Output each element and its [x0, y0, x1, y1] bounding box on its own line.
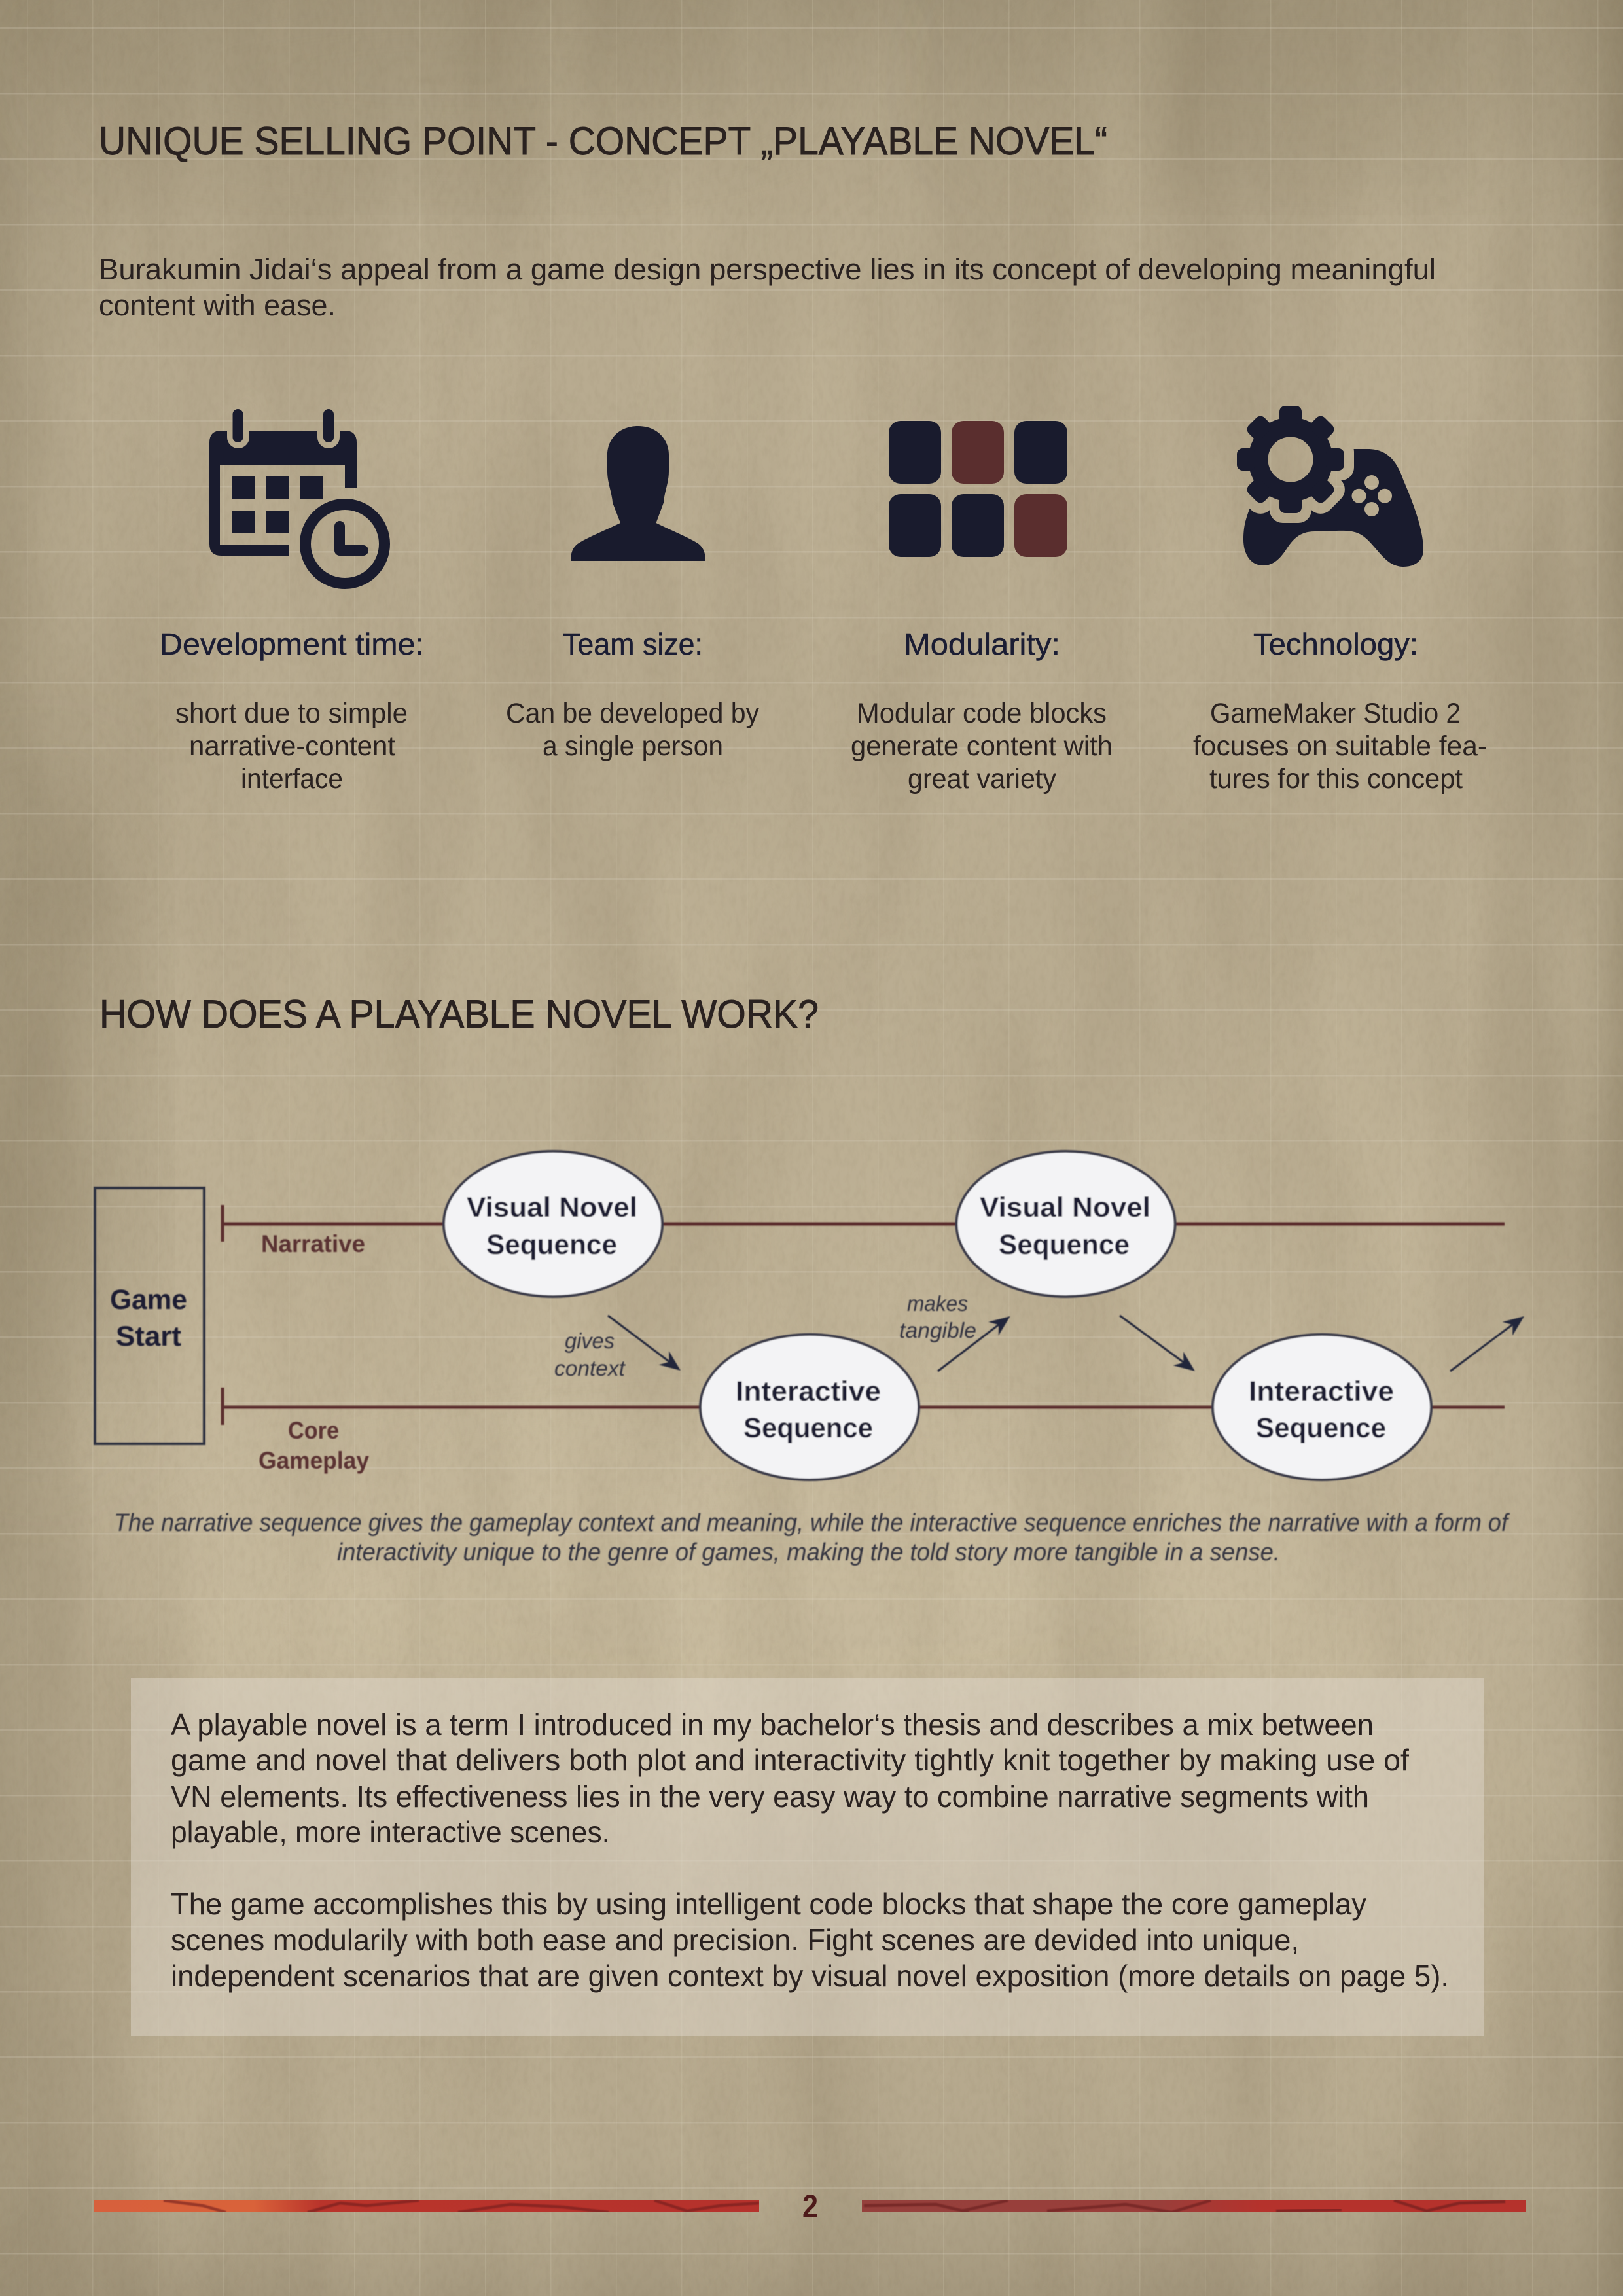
description: modularity: Modular code blocks	[857, 698, 1107, 729]
description: modularity	[851, 698, 1113, 795]
label: core gameplay: Gameplay	[259, 1447, 369, 1474]
paragraph 1: playable, more interactive scenes.	[171, 1815, 610, 1849]
narrative timeline	[223, 1205, 1505, 1242]
diagram caption	[114, 1509, 1510, 1566]
arrow label: makes tangible	[899, 1291, 976, 1342]
description: technology: GameMaker Studio 2	[1210, 698, 1461, 729]
heading: technology: Technology:	[1253, 627, 1418, 661]
footer: left red bar	[94, 2200, 759, 2212]
heading: team size: Team size:	[563, 627, 703, 661]
diagram: playable novel flow	[95, 1151, 1524, 1566]
arrow label: makes tangible: tangible	[899, 1318, 976, 1342]
description: development time: narrative-content	[189, 730, 395, 762]
heading: modularity: Modularity:	[904, 627, 1060, 661]
panel: team size	[506, 426, 759, 762]
node: visual novel sequence 2	[957, 1151, 1175, 1297]
game start box: Game	[110, 1284, 187, 1316]
description: team size	[506, 698, 759, 762]
node: interactive sequence 1: Sequence	[743, 1412, 873, 1444]
arrow label: gives context: context	[554, 1356, 626, 1380]
paragraph 1	[171, 1708, 1409, 1849]
description: development time: short due to simple	[175, 698, 408, 729]
node: visual novel sequence 2: Visual Novel	[980, 1192, 1150, 1223]
game start box	[95, 1188, 204, 1444]
description: development time: interface	[241, 763, 343, 795]
description: technology: focuses on suitable fea-	[1193, 730, 1487, 762]
panel: technology	[1193, 406, 1487, 795]
icon: person silhouette	[571, 426, 705, 561]
diagram caption: The narrative sequence gives the gameplay context and meaning, while the interactive sequence enriches the narrative with a form of	[114, 1509, 1510, 1537]
description: modularity: generate content with	[851, 730, 1113, 762]
arrow label: gives context	[554, 1329, 626, 1380]
description: technology	[1193, 698, 1487, 795]
intro text: content with ease.	[99, 289, 336, 322]
description: team size: Can be developed by	[506, 698, 759, 729]
label: core gameplay	[259, 1417, 369, 1474]
diagram caption: interactivity unique to the genre of games, making the told story more tangible in a sense.	[337, 1539, 1280, 1566]
node: visual novel sequence 1: Visual Novel	[467, 1192, 637, 1223]
paragraph 2	[171, 1887, 1449, 1993]
paragraph 2: The game accomplishes this by using intelligent code blocks that shape the core gameplay	[171, 1887, 1366, 1921]
node: interactive sequence 1	[700, 1335, 919, 1480]
label: narrative: Narrative	[261, 1230, 365, 1257]
node: interactive sequence 2: Sequence	[1256, 1412, 1386, 1444]
paragraph 1: VN elements. Its effectiveness lies in the very easy way to combine narrative segments with	[171, 1780, 1369, 1814]
arrow: gameplay onward	[1450, 1316, 1524, 1371]
node: visual novel sequence 1: Sequence	[486, 1229, 617, 1261]
arrow: narrative to gameplay	[1120, 1316, 1195, 1371]
description: team size: a single person	[543, 730, 723, 762]
arrow label: gives context: gives	[565, 1329, 615, 1353]
panel: development time	[160, 409, 424, 795]
paragraph 2: independent scenarios that are given context by visual novel exposition (more details on page 5).	[171, 1959, 1449, 1993]
game start box: Start	[116, 1321, 181, 1352]
node: visual novel sequence 1	[444, 1151, 662, 1297]
page number: 2	[802, 2188, 818, 2225]
node: interactive sequence 2	[1213, 1335, 1431, 1480]
node: interactive sequence 1: Interactive	[736, 1376, 881, 1407]
core gameplay timeline	[223, 1388, 1505, 1425]
heading: how does a playable novel work: HOW DOES A PLAYABLE NOVEL WORK?	[99, 992, 819, 1036]
description: modularity: great variety	[908, 763, 1056, 795]
description: development time	[175, 698, 408, 795]
panel: modularity	[851, 421, 1113, 795]
icon: calendar with clock	[209, 409, 385, 584]
title: UNIQUE SELLING POINT - CONCEPT „PLAYABLE NOVEL“	[99, 119, 1107, 163]
footer: right red bar	[862, 2200, 1526, 2212]
arrow: gives context	[608, 1316, 681, 1371]
paragraph 1: game and novel that delivers both plot and interactivity tightly knit together by making use of	[171, 1743, 1409, 1777]
node: visual novel sequence 2: Sequence	[999, 1229, 1130, 1261]
paragraph 1: A playable novel is a term I introduced in my bachelor‘s thesis and describes a mix between	[171, 1708, 1374, 1742]
description: technology: tures for this concept	[1209, 763, 1463, 795]
intro text	[99, 253, 1436, 322]
paragraph 2: scenes modularily with both ease and precision. Fight scenes are devided into unique,	[171, 1923, 1299, 1957]
intro text: Burakumin Jidai‘s appeal from a game design perspective lies in its concept of developing meaningful	[99, 253, 1436, 286]
icon: modular blocks	[889, 421, 1067, 557]
label: core gameplay: Core	[288, 1417, 339, 1444]
heading: development time: Development time:	[160, 627, 424, 661]
arrow label: makes tangible: makes	[907, 1291, 968, 1316]
node: interactive sequence 2: Interactive	[1249, 1376, 1394, 1407]
icon: gear and gamepad	[1237, 406, 1423, 567]
panel: playable novel explanation	[131, 1678, 1484, 2036]
arrow: makes tangible	[938, 1316, 1010, 1371]
